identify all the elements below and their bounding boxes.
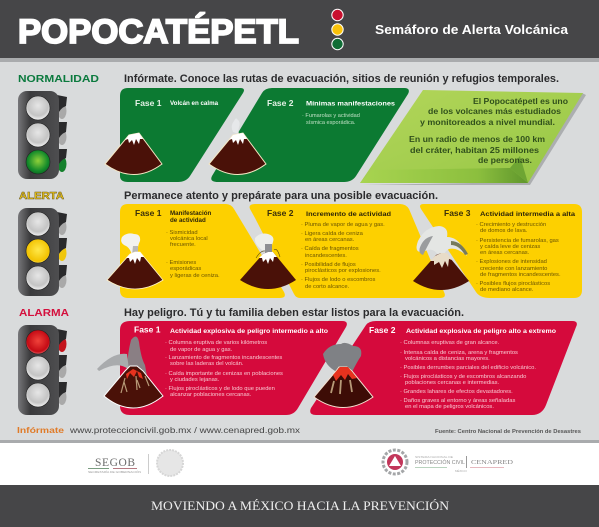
- icon: green traffic light: [18, 91, 67, 179]
- bullet list: · Columna eruptiva de varios kilómetros: [165, 340, 267, 346]
- panel title: de actividad: [170, 217, 206, 224]
- panel title: Manifestación: [170, 210, 211, 217]
- source: Fuente: Centro Nacional de Prevención de Desastres: [435, 429, 581, 435]
- heading: alarma: Hay peligro. Tú y tu familia deben estar listos para la evacuación.: [124, 307, 464, 319]
- label: fase 2: Fase 2: [267, 98, 294, 108]
- bullet list: en áreas cercanas.: [305, 237, 355, 243]
- bullet list: · Daños graves al entorno y áreas señaladas: [400, 398, 515, 404]
- bullet list: · Intensa caída de ceniza, arena y fragmentos: [400, 350, 518, 356]
- logo: proteccion civil and cenapred: [383, 450, 513, 474]
- note text: [409, 97, 568, 165]
- bullet list: · Caída importante de cenizas en poblaciones: [165, 371, 283, 377]
- bullet list: [302, 113, 360, 126]
- bullet list: [301, 222, 385, 290]
- bullet list: de domos de lava.: [480, 228, 528, 234]
- logo: proteccion civil and cenapred: CENAPRED: [471, 459, 513, 466]
- note text: En un radio de menos de 100 km: [409, 135, 545, 144]
- bullet list: · Emisiones: [166, 260, 196, 266]
- icon: national emblem: [157, 450, 183, 476]
- bullet list: · Explosiones de intensidad: [476, 259, 547, 265]
- bullet list: frecuente.: [170, 242, 196, 248]
- header band: [0, 0, 599, 62]
- bullet list: de corto alcance.: [305, 284, 350, 290]
- bullet list: · Persistencia de fumarolas, gas: [476, 238, 559, 244]
- panel: alerta fase 2: [240, 204, 445, 298]
- logo: proteccion civil and cenapred: SISTEMA NACIONAL DE: [415, 455, 453, 459]
- note text: de personas.: [478, 156, 532, 165]
- heading: alerta: Permanece atento y prepárate para una posible evacuación.: [124, 190, 438, 202]
- label: fase 1: Fase 1: [135, 98, 162, 108]
- bullet list: de mediano alcance.: [480, 287, 534, 293]
- logo: proteccion civil and cenapred: PROTECCIÓN CIVIL: [415, 459, 465, 466]
- folded corner: [360, 168, 528, 183]
- logo band: [0, 440, 599, 485]
- bottom band: [0, 485, 599, 527]
- note text: de los volcanes más estudiados: [428, 107, 561, 116]
- note text: y monitoreados a nivel mundial.: [420, 118, 555, 127]
- panel title: Actividad explosiva de peligro alto a extremo: [406, 328, 556, 335]
- icon: extreme eruption volcano: [314, 343, 373, 408]
- bullet list: sobre las laderas del volcán.: [170, 361, 244, 367]
- callout: popocatépetl note: [360, 90, 586, 185]
- subtitle: Semáforo de Alerta Volcánica: [375, 23, 569, 37]
- panel title: Incremento de actividad: [306, 211, 391, 218]
- slogan: MOVIENDO A MÉXICO HACIA LA PREVENCIÓN: [151, 498, 450, 513]
- bullet list: volcánicos a distancias mayores.: [405, 356, 490, 362]
- note text: del cráter, habitan 25 millones: [410, 146, 539, 155]
- bullet list: [166, 230, 220, 279]
- bullet list: en áreas cercanas.: [480, 250, 530, 256]
- label: fase 2: Fase 2: [267, 208, 294, 218]
- bullet list: y ciudades lejanas.: [170, 377, 220, 383]
- icon: red traffic light: [18, 325, 67, 415]
- panel: alarma fase 2: [310, 321, 577, 415]
- label: fase 2: Fase 2: [369, 325, 396, 335]
- panel: alerta fase 3: [413, 204, 582, 298]
- bullet list: incandescentes.: [305, 253, 347, 259]
- label: fase 1: Fase 1: [134, 324, 161, 334]
- note text: El Popocatépetl es uno: [473, 97, 568, 106]
- logo: segob: [88, 450, 183, 476]
- title: POPOCATÉPETL: [18, 13, 299, 51]
- bullet list: en el mapa de peligros volcánicos.: [405, 404, 494, 410]
- bullet list: · Crecimiento y destrucción: [476, 222, 546, 228]
- bullet list: poblaciones cercanas e intermedias.: [405, 380, 499, 386]
- bullet list: volcánica local: [170, 236, 208, 242]
- icon: yellow traffic light: [18, 208, 67, 296]
- bullet list: creciente con lanzamiento: [480, 266, 547, 272]
- label: fase 3: Fase 3: [444, 208, 471, 218]
- bullet list: · Flujos piroclásticos y de escombros alcanzando: [400, 374, 526, 380]
- bullet list: [476, 222, 561, 293]
- bullet list: y caída leve de cenizas: [480, 244, 540, 250]
- bullet list: esporádicas: [170, 266, 201, 272]
- bullet list: · Fumarolas y actividad: [302, 113, 360, 119]
- icon: erupting volcano: [97, 336, 163, 408]
- logo: segob: SEGOB: [95, 457, 135, 469]
- level label: alarma: ALARMA: [19, 308, 69, 319]
- bullet list: · Sismicidad: [166, 230, 198, 236]
- panel: normalidad fase 1: [105, 88, 244, 182]
- icon: volcano with large plume: [413, 226, 469, 290]
- icon: volcano with plume: [107, 233, 163, 289]
- bullet list: · Posibilidad de flujos: [301, 262, 356, 268]
- bullet list: piroclásticos por explosiones.: [305, 268, 381, 274]
- bullet list: · Posibles flujos piroclásticos: [476, 281, 550, 287]
- panel: alerta fase 1: [107, 204, 285, 298]
- logo: segob: SECRETARÍA DE GOBERNACIÓN: [88, 469, 141, 474]
- logo: proteccion civil and cenapred: MÉXICO: [455, 468, 468, 473]
- bullet list: · Flujos de lodo o escombros: [301, 277, 376, 283]
- bullet list: y ligeras de ceniza.: [170, 273, 220, 279]
- bullet list: de fragmentos incandescentes.: [480, 272, 561, 278]
- icon: volcano with ash plume: [240, 234, 296, 289]
- bullet list: · Pluma de vapor de agua y gas.: [301, 222, 385, 228]
- panel title: Mínimas manifestaciones: [306, 100, 396, 108]
- bullet list: · Flujos piroclásticos y de lodo que pueden: [165, 386, 275, 392]
- panel: normalidad fase 2: [209, 88, 409, 182]
- panel title: [170, 210, 211, 224]
- bullet list: de vapor de agua y gas.: [170, 347, 233, 353]
- panel title: Volcán en calma: [170, 100, 219, 107]
- icon: header traffic light: [332, 9, 343, 50]
- icon: volcano with small plume: [209, 118, 266, 174]
- bullet list: · Caída de fragmentos: [301, 246, 359, 252]
- bullet list: · Posibles derrumbes parciales del edificio volcánico.: [400, 365, 536, 371]
- footer links: Infórmate: [17, 425, 64, 435]
- footer links: [17, 425, 581, 435]
- bullet list: sísmica esporádica.: [306, 120, 356, 126]
- bullet list: · Lanzamiento de fragmentos incandescentes: [165, 355, 282, 361]
- icon: volcano: [105, 133, 162, 174]
- level label: normalidad: NORMALIDAD: [18, 73, 99, 85]
- heading: normalidad: Infórmate. Conoce las rutas de evacuación, sitios de reunión y refugios temporales.: [124, 73, 559, 85]
- bullet list: · Columnas eruptivas de gran alcance.: [400, 340, 500, 346]
- bullet list: · Ligera caída de ceniza: [301, 231, 364, 237]
- panel title: Actividad intermedia a alta: [480, 211, 576, 218]
- websites: www.proteccioncivil.gob.mx / www.cenapred.gob.mx: [69, 425, 301, 435]
- bullet list: alcanzar poblaciones cercanas.: [170, 392, 252, 398]
- panel: alarma fase 1: [97, 321, 347, 415]
- level label: alerta: ALERTA: [19, 191, 64, 202]
- bullet list: · Grandes lahares de efectos devastadores.: [400, 389, 513, 395]
- bullet list: [165, 340, 283, 398]
- label: fase 1: Fase 1: [135, 208, 162, 218]
- panel title: Actividad explosiva de peligro intermedio a alto: [170, 328, 328, 335]
- bullet list: [400, 340, 536, 410]
